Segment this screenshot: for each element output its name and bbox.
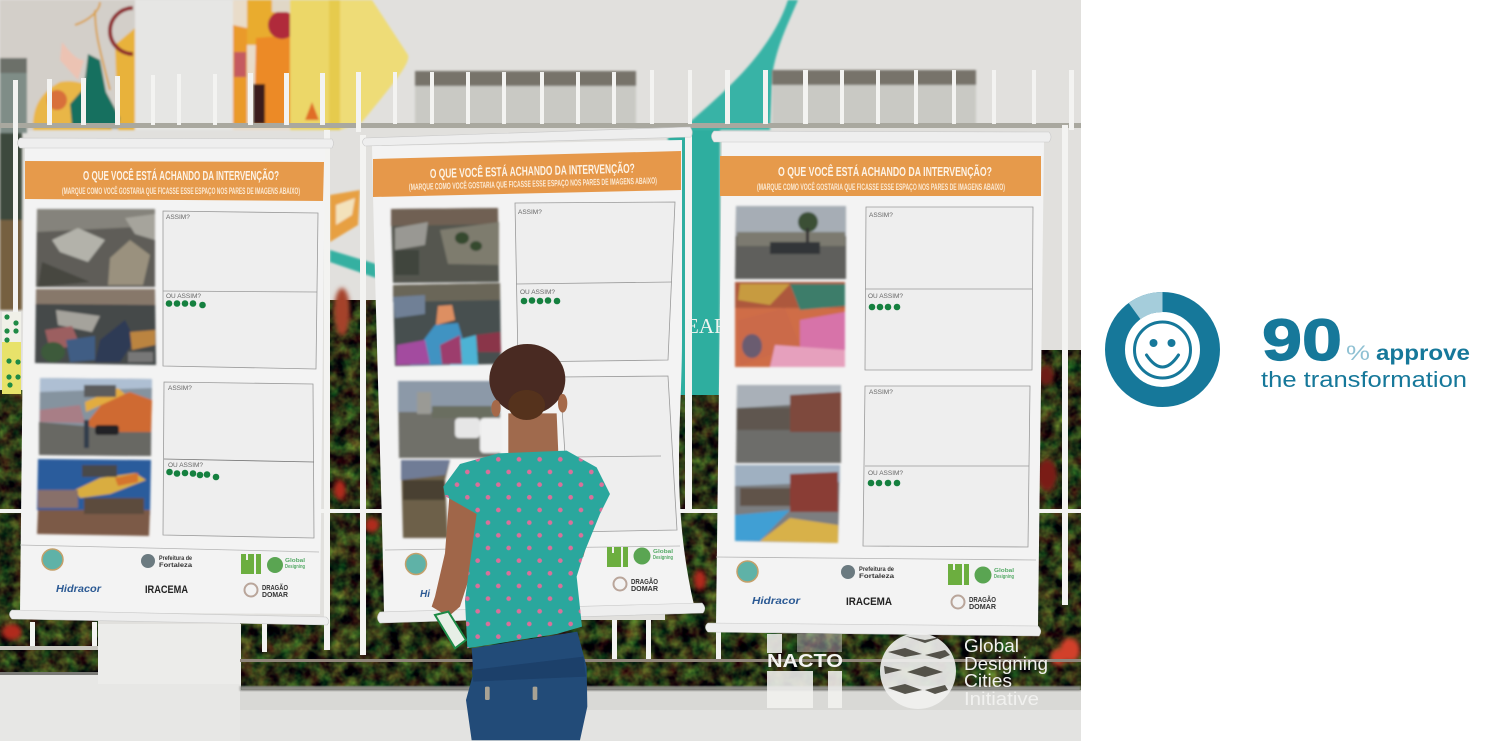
girl's arms [432,497,479,617]
poster 1 photo pair A [35,209,156,365]
poster 3 answer box A: OU ASSIM? [868,293,903,300]
poster 1 top roller [18,138,334,148]
wall background [0,0,1081,624]
poster 2 photo pair A [391,208,501,366]
poster 2 orange header: (MARQUE COMO VOCÊ GOSTARIA QUE FICASSE ESSE ESPAÇO NOS PARES DE IMAGENS ABAIXO) [409,175,657,192]
poster 3 answer box A: ASSIM? [869,212,893,219]
poster 2 answer box A: ASSIM? [518,209,542,216]
poster 1 orange header: (MARQUE COMO VOCÊ GOSTARIA QUE FICASSE ESSE ESPAÇO NOS PARES DE IMAGENS ABAIXO) [62,185,300,196]
poster 1 answer box A [163,211,318,369]
poster 1 photo pair B [37,378,152,536]
photo: girl in front of survey posters on a fence [0,0,1081,741]
mural on the wall [0,0,798,412]
poster 2 answer box A: OU ASSIM? [520,289,555,296]
poster 3 answer box A [865,207,1033,370]
poster 3 [706,131,1051,636]
stat text: 90% approve the transformation: 90 [1262,308,1342,373]
organisation name: Global [964,636,1019,656]
poster 1 answer box B: OU ASSIM? [168,462,203,469]
poster 3 answer box B: OU ASSIM? [868,470,903,477]
poster 1 answer box A: ASSIM? [166,214,190,221]
poster 2 stickers [521,297,560,304]
poster 3 sponsor logos: DOMAR [969,604,996,611]
poster 1 sponsor logos: IRACEMA [145,584,188,596]
poster 1 answer box B [163,382,314,538]
poster 1 sponsor logos: Designing [285,564,305,570]
globe mark [880,633,956,709]
poster 2 sponsor logos [406,547,674,600]
girl's teal polka-dot shirt [443,451,610,648]
poster 3 orange header: O QUE VOCÊ ESTÁ ACHANDO DA INTERVENÇÃO? [778,164,992,179]
poster 2 bottom roller [378,603,705,623]
poster 2 answer box B [560,376,677,532]
poster 1 sponsor logos [42,549,306,599]
poster 1 answer box B: ASSIM? [168,385,192,392]
poster 1 sponsor logos: DOMAR [262,592,288,599]
wall lettering: EAR [686,314,728,338]
sticker sheet hanging at left [2,312,21,394]
poster 3 answer box B: ASSIM? [869,389,893,396]
poster 3 orange header [720,156,1041,196]
poster 1 [10,138,334,625]
poster 3 photo pair B [735,385,841,543]
poster 3 sponsor logos: Designing [994,574,1014,580]
poster 1 answer box A: OU ASSIM? [166,293,201,300]
poster 2 [362,127,705,623]
organisation name [964,636,1048,709]
poster 3 orange header: (MARQUE COMO VOCÊ GOSTARIA QUE FICASSE ESSE ESPAÇO NOS PARES DE IMAGENS ABAIXO) [757,181,1005,192]
poster 1 paper [20,146,325,614]
poster 2 answer box A [515,202,675,362]
girl's jeans [466,632,587,740]
poster 2 paper [372,140,694,612]
NACTO logo overlay: NACTO [767,651,843,671]
poster 2 sponsor logos: Global [653,549,674,555]
poster 2 photo pair B [398,381,502,538]
poster 2 sponsor logos: DRAGÃO [631,577,658,586]
poster 1 sponsor logos: Hidracor [56,584,102,595]
poster 3 top roller [712,131,1051,142]
poster 1 sponsor logos: Prefeitura de [159,556,193,562]
poster 3 stickers A [869,304,900,310]
poster 2 orange header: O QUE VOCÊ ESTÁ ACHANDO DA INTERVENÇÃO? [430,161,635,181]
poster 1 orange header [25,161,324,201]
organisation name: Initiative [964,689,1039,709]
stat: donut chart 90% with smiley [1115,292,1210,397]
stat text: 90% approve the transformation [1261,308,1470,392]
poster 1 sponsor logos: Global [285,558,306,564]
poster 1 stickers A [166,300,206,308]
organisation name: Cities [964,671,1012,691]
poster 1 sponsor logos: DRAGÃO [262,583,288,592]
poster 1 stickers B [166,469,219,480]
teal swoosh [690,0,798,130]
poster 3 sponsor logos [737,561,1015,611]
white fence [0,70,1081,662]
stat text: 90% approve the transformation: % [1346,342,1370,365]
poster 3 sponsor logos: Fortaleza [859,574,895,580]
poster 2 top roller [362,127,692,146]
windows [415,70,976,125]
organisation name: Designing [964,654,1048,674]
low white wall [0,624,1081,692]
stat text: 90% approve the transformation: the transformation [1261,367,1467,392]
girl's neck [508,413,558,455]
poster 1 orange header: O QUE VOCÊ ESTÁ ACHANDO DA INTERVENÇÃO? [83,168,279,183]
girl seen from behind [432,344,610,740]
poster 2 sponsor logos: Designing [653,555,673,561]
poster 1 bottom roller [10,610,329,625]
poster 3 paper [716,142,1044,626]
icon: smiley face [1134,322,1190,378]
sticker card in girl's hand [435,612,466,648]
poster 3 sponsor logos: Global [994,568,1015,574]
poster 3 bottom roller [706,623,1041,636]
girl's head and hair [489,344,567,420]
poster 3 sponsor logos: DRAGÃO [969,595,996,604]
poster 2 sponsor logos: DOMAR [631,586,658,593]
poster 2 sponsor logos: Hi [420,589,430,600]
poster 3 sponsor logos: Prefeitura de [859,567,895,573]
poster 3 photo pair A [735,206,846,367]
poster 3 stickers B [868,480,900,486]
stat text: 90% approve the transformation: approve [1376,342,1470,365]
donut remaining 10 percent [1129,292,1162,319]
Global Designing Cities Initiative logo overlay [880,633,1048,709]
poster 3 sponsor logos: IRACEMA [846,596,892,608]
poster 3 sponsor logos: Hidracor [752,596,801,607]
poster 3 answer box B [863,386,1030,547]
NACTO logo overlay [767,634,843,708]
poster 1 sponsor logos: Fortaleza [159,563,193,569]
poster 2 orange header [373,151,681,197]
donut ring 90 percent [1115,302,1210,397]
hedge of plants [0,288,1081,692]
